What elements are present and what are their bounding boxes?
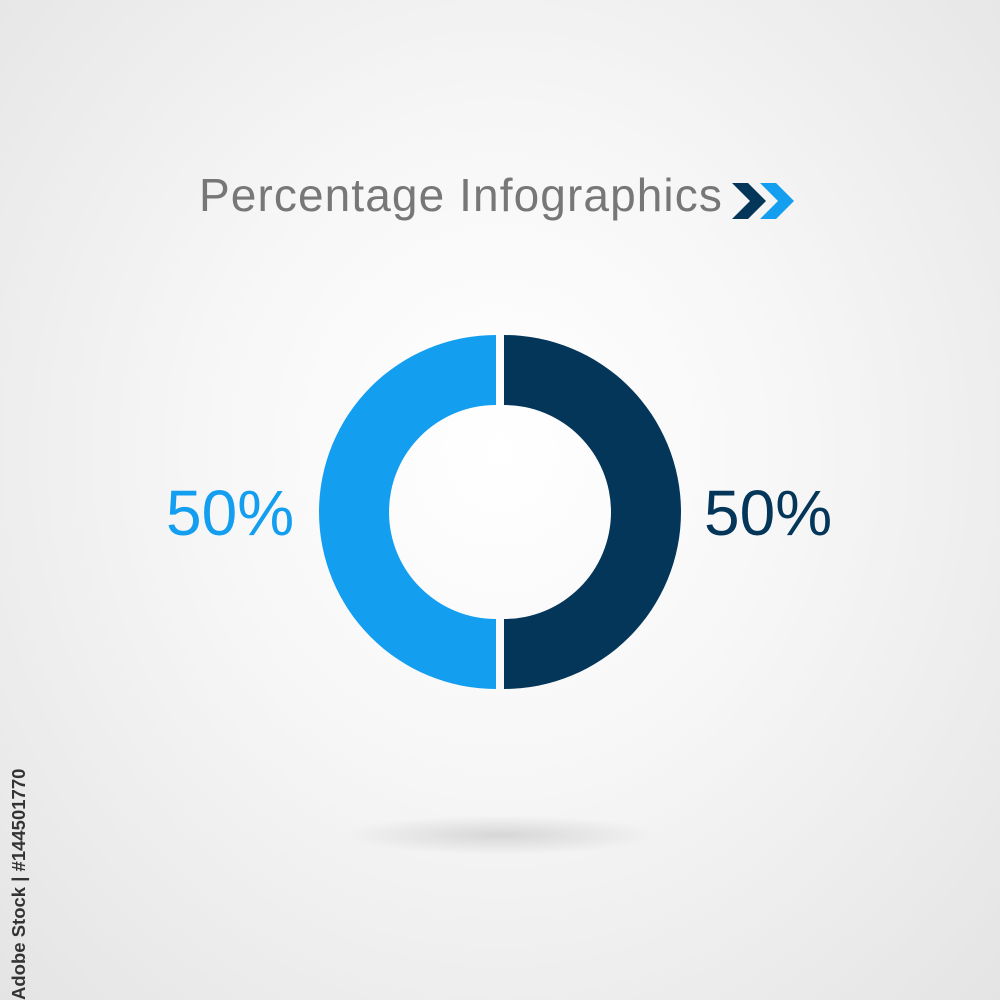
- title: Percentage Infographics: [199, 169, 723, 221]
- icon: double chevron arrows: [732, 183, 794, 219]
- label: left 50%: 50%: [166, 477, 294, 549]
- segment: right 50% dark blue: [504, 335, 681, 689]
- watermark id text: Adobe Stock | #144501770: [8, 769, 29, 1000]
- label: right 50%: 50%: [704, 477, 832, 549]
- shadow under chart: [340, 815, 660, 855]
- segment: left 50% light blue: [319, 335, 496, 689]
